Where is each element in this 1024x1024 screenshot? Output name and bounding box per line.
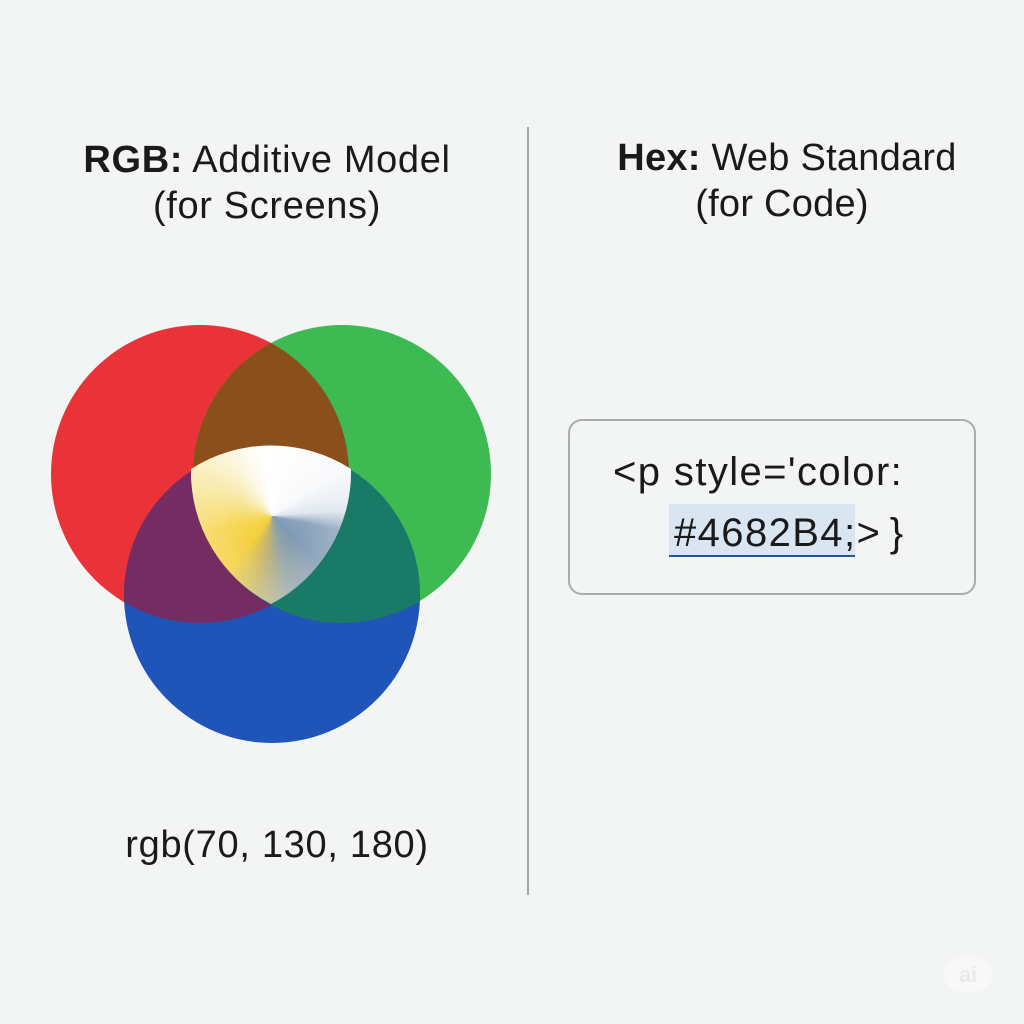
circle: blue	[124, 447, 420, 743]
overlap: red and blue	[124, 471, 271, 623]
watermark badge	[944, 957, 992, 992]
heading: RGB additive model: RGB: Additive Model	[83, 139, 451, 181]
overlap: green and blue	[231, 470, 420, 623]
code line 1: <p style='color:	[613, 450, 903, 494]
code line 2: #4682B4;> }	[674, 511, 905, 555]
RGB Venn diagram	[51, 325, 491, 743]
center divider	[527, 127, 529, 895]
circle: red	[51, 325, 349, 623]
heading: RGB additive model	[83, 139, 451, 227]
label: rgb value: rgb(70, 130, 180)	[125, 824, 429, 866]
code box	[568, 419, 976, 595]
overlap: white center with conic shading	[190, 446, 352, 604]
hex value highlight	[669, 504, 855, 557]
overlap: red and green	[193, 343, 349, 468]
watermark badge: ai	[959, 962, 977, 987]
heading: RGB additive model: (for Screens)	[153, 185, 381, 227]
heading: Hex web standard: Hex: Web Standard	[617, 137, 957, 179]
heading: Hex web standard: (for Code)	[695, 183, 869, 225]
heading: Hex web standard	[617, 137, 957, 225]
circle: green	[193, 325, 491, 623]
